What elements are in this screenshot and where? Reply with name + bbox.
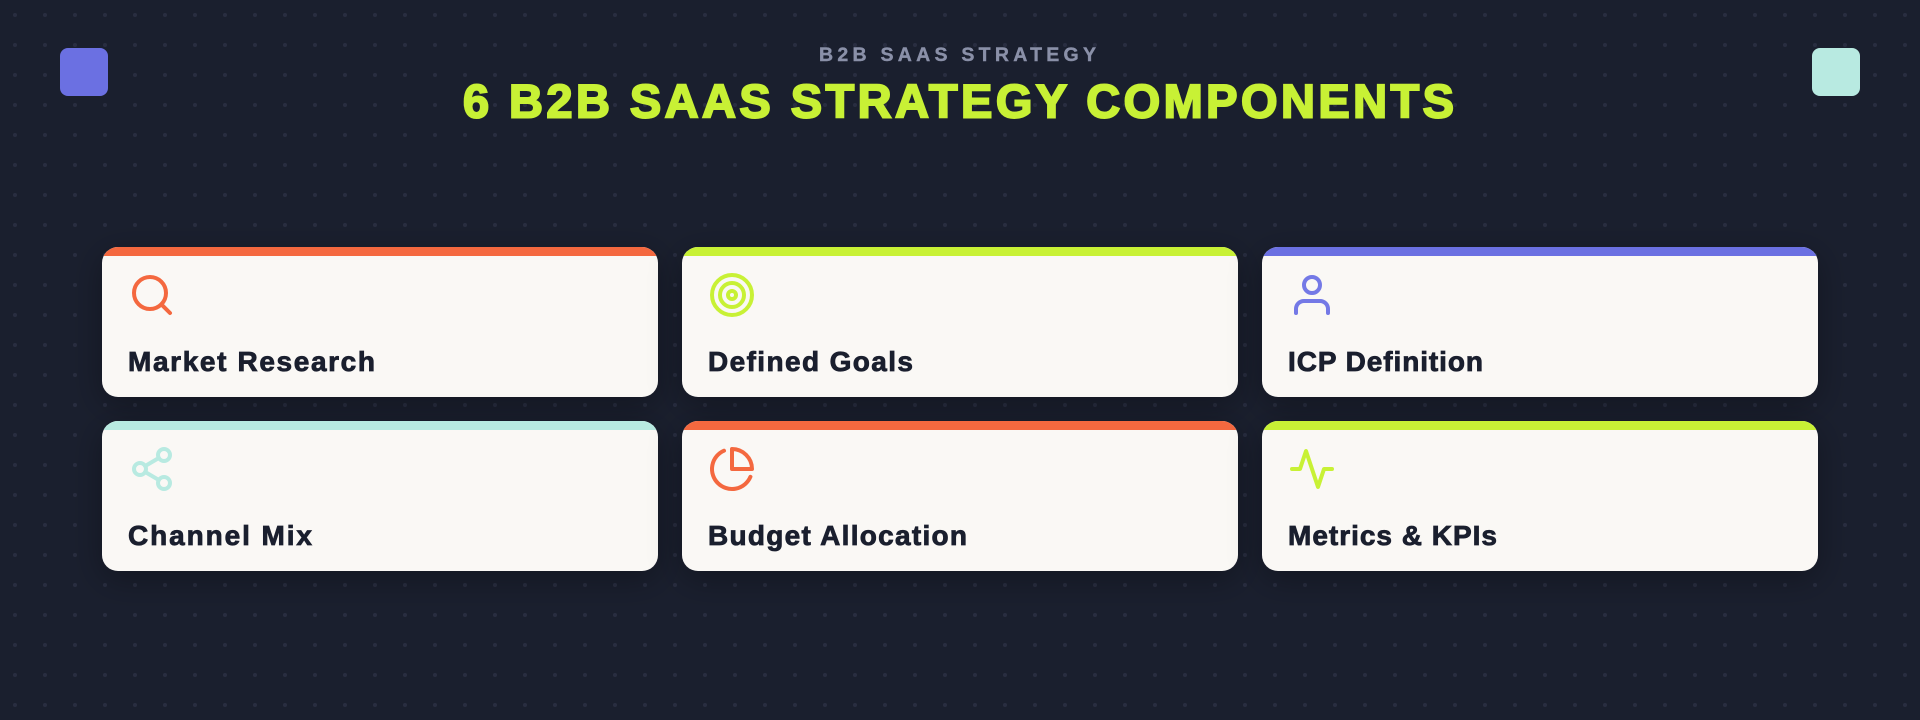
icon: activity pulse xyxy=(1292,451,1332,487)
panel: Channel Mix xyxy=(102,421,658,571)
label: Budget Allocation: Budget Allocation xyxy=(708,520,967,551)
title: 6 B2B SAAS STRATEGY COMPONENTS xyxy=(463,74,1454,128)
label: Channel Mix: Channel Mix xyxy=(128,520,312,551)
icon: person xyxy=(1296,277,1328,313)
panel: Metrics & KPIs xyxy=(1262,421,1818,571)
label: ICP Definition: ICP Definition xyxy=(1288,346,1483,377)
decorative square: purple xyxy=(60,48,108,96)
panel: ICP Definition xyxy=(1262,247,1818,397)
panel: Market Research xyxy=(102,247,658,397)
icon: share nodes xyxy=(134,449,170,489)
decorative square: teal xyxy=(1812,48,1860,96)
panel: Budget Allocation xyxy=(682,421,1238,571)
label: Metrics & KPIs: Metrics & KPIs xyxy=(1288,520,1497,551)
icon: target xyxy=(712,275,752,315)
eyebrow heading: B2B SAAS STRATEGY xyxy=(819,44,1096,66)
panel: Defined Goals xyxy=(682,247,1238,397)
icon: pie chart xyxy=(712,449,752,489)
label: Defined Goals: Defined Goals xyxy=(708,346,913,377)
icon: magnifying glass xyxy=(134,277,170,313)
label: Market Research: Market Research xyxy=(128,346,375,377)
